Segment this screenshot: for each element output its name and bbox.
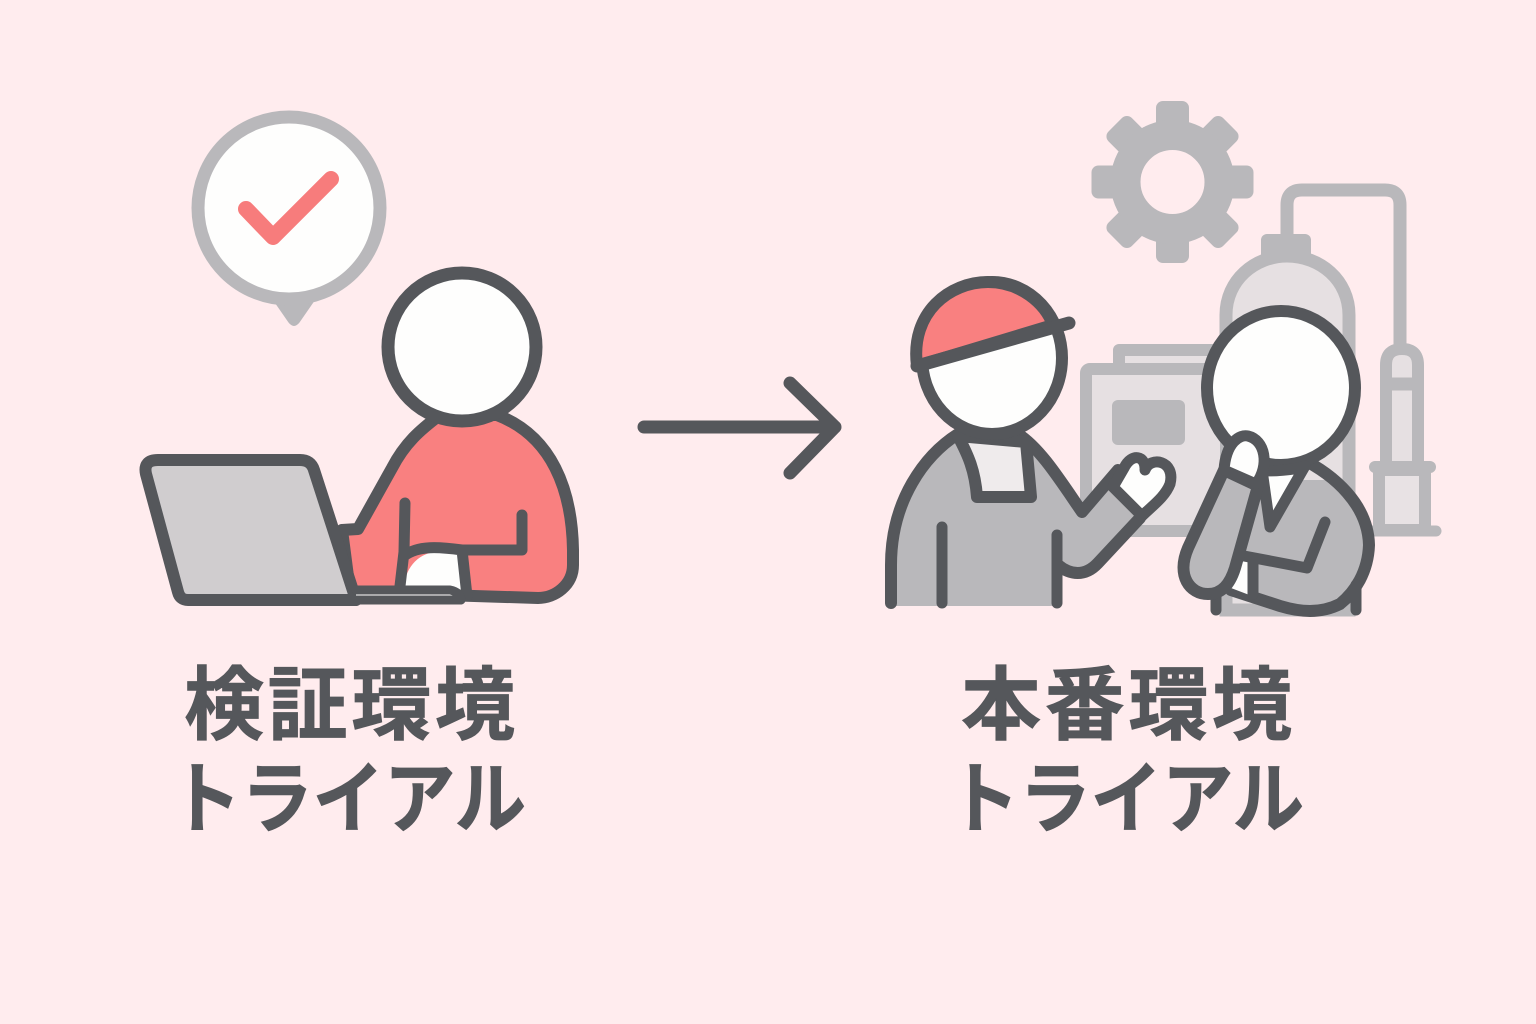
worker head (922, 282, 1062, 434)
label: production environment trial (948, 661, 1304, 843)
pipe (1287, 190, 1400, 350)
thinker hand (1224, 436, 1264, 484)
thinker collar (1262, 466, 1305, 527)
body (342, 415, 573, 598)
tank (1226, 256, 1349, 610)
control box (1119, 350, 1230, 368)
hand (404, 552, 467, 590)
figure: person working at laptop (146, 273, 573, 600)
thinker torso (1222, 480, 1369, 612)
figure: thinking person (1184, 311, 1369, 612)
label: production environment trial: 本番環境 (961, 661, 1292, 750)
worker body (891, 434, 1160, 606)
label: verification environment trial (170, 661, 526, 843)
thinker arm lines (1216, 522, 1356, 610)
label: production environment trial: トライアル (948, 755, 1304, 843)
label: verification environment trial: 検証環境 (184, 661, 515, 750)
illustration: factory machinery (1086, 190, 1436, 610)
worker cap (916, 282, 1053, 366)
icon: speech bubble with check mark (198, 117, 380, 324)
arms (400, 503, 522, 596)
worker collar (958, 436, 1031, 497)
arrow (644, 383, 835, 473)
thinker head (1207, 311, 1355, 465)
figure: worker with red cap (891, 282, 1171, 606)
label: verification environment trial: トライアル (170, 755, 526, 843)
worker hand (1113, 458, 1171, 516)
thinker forearm (1184, 470, 1258, 594)
icon: gear (1092, 101, 1254, 263)
small cylinder (1386, 349, 1418, 470)
head (388, 273, 536, 421)
laptop (146, 460, 356, 600)
worker sleeve lines (942, 527, 1057, 603)
